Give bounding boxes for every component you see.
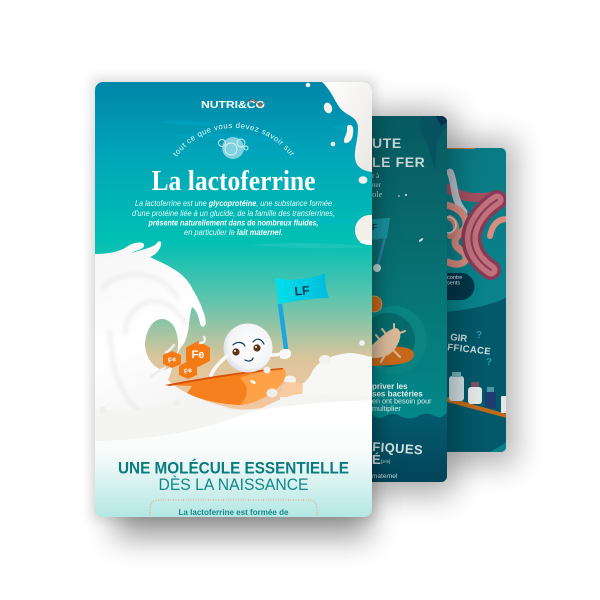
intestine illustration [440,172,507,270]
reference note: [3-5] [381,459,390,464]
page 2 intro text: ner [372,181,382,189]
page 2: iron [372,116,447,482]
iron hexagons: Fe [183,367,193,376]
lower heading: FIQUES [372,439,424,458]
peach reflection [278,382,303,397]
lower text: maternel [372,473,398,480]
page 2 heading: UTE [372,135,402,151]
bacteria caption: priver les [372,382,408,391]
milk wave [95,241,238,410]
dark lower section [447,298,506,452]
bottom corner swoosh [490,442,506,452]
water streaks [160,121,372,248]
mascot: lactoferrin ball [211,324,285,375]
wave shading [104,274,185,409]
dotted callout: La lactoferrine est formée de [178,507,289,517]
intro paragraph: présente naturellement dans de nombreux fluides, [148,218,318,228]
bacteria caption: en ont besoin pour [372,396,432,406]
curved subtitle: tout ce que vous devez savoir sur [173,122,294,156]
orange top strip [447,148,475,149]
section heading: GIR [450,332,468,345]
title: La lactoferrine [152,166,316,197]
flag: LF [294,283,311,299]
milk drops on right [284,340,365,384]
page 2 heading [372,138,424,167]
intro paragraph: d'une protéine liée à un glucide, de la famille des transferrines, [132,209,335,218]
bacteria circle [372,306,426,367]
supplement bottles on shelf [447,372,507,418]
flag behind main page: F [372,223,377,232]
page 2 heading: LE FER [372,154,425,170]
milk droplets on board [100,366,278,414]
section heading: DÈS LA NAISSANCE [158,475,308,494]
intro paragraph: en particulier le lait maternel. [184,228,283,237]
page 3: absorption [447,148,506,452]
iron hexagons: Fe [192,349,204,361]
surfboard [165,368,286,405]
callout text [447,275,462,284]
bacteria caption: ses bactéries [372,390,423,398]
footer background [95,400,372,517]
main page shadow [115,130,370,538]
main page [95,82,372,517]
question marks [476,331,492,365]
lower heading [372,442,422,464]
icon: molecule [218,137,248,159]
sky background [95,82,372,517]
dark pill callout [447,273,474,300]
infographic mockup: three stacked pages [87,74,534,557]
arms [211,352,285,375]
eyes and mouth [232,339,264,361]
callout text: contre [447,275,462,281]
flag [275,273,329,359]
section heading: FFICACE [447,342,492,358]
question marks: ? [476,330,482,341]
flag behind main page [372,218,390,272]
dotted callout [150,500,317,540]
milk base right mound [280,353,372,400]
section heading: UNE MOLÉCULE ESSENTIELLE [118,458,349,478]
logo [202,100,264,108]
lower heading: É [372,452,381,467]
page 2 shadow [362,110,454,495]
bacteria caption: multiplier [372,404,401,413]
scallop divider and lower section [372,412,447,482]
question marks: ? [486,357,492,368]
specks [398,194,424,242]
iron hexagons [163,341,210,379]
logo: NUTRI&CO [201,99,265,111]
milk splash top right [306,82,372,245]
main page halo [92,78,375,520]
page 2 intro text [372,173,382,197]
intro paragraph: La lactoferrine est une glycoprotéine, une substance formée [135,199,333,208]
section heading [448,334,490,354]
orange number badge [372,296,382,312]
bacteria caption [372,382,432,413]
callout text: sents [447,280,460,286]
intro paragraph [132,199,335,237]
page 2 intro text: ole [372,189,383,199]
dark hanging shape [421,116,447,170]
section heading [118,458,349,494]
iron hexagons: Fe [167,356,177,365]
page 3 shadow [438,140,516,465]
page 2 intro text: r à [372,172,380,180]
milk tendrils around iron [151,337,205,377]
milk foam over board [239,394,302,411]
